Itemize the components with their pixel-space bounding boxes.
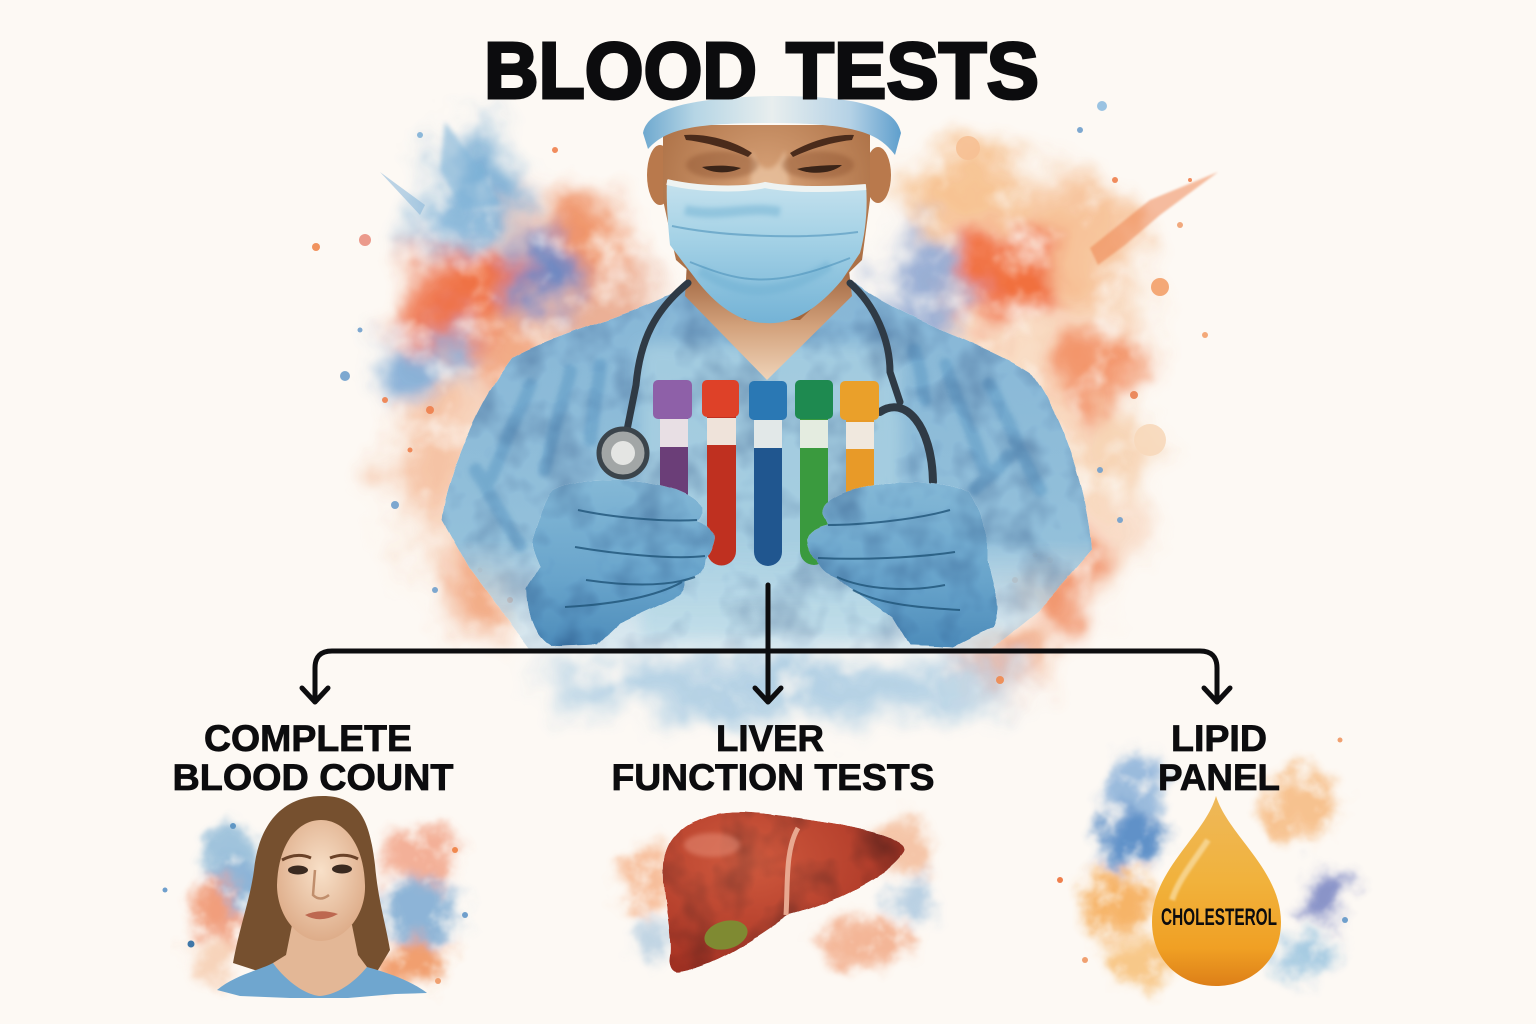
heading: liver function tests: FUNCTION TESTS bbox=[612, 757, 934, 798]
splash: lipid bbox=[1057, 738, 1350, 986]
chest wash bbox=[640, 345, 900, 640]
title: BLOOD bbox=[484, 26, 757, 115]
icon: cholesterol drop bbox=[1152, 796, 1281, 986]
face bbox=[277, 820, 365, 941]
stethoscope bbox=[599, 283, 933, 482]
heading: liver function tests bbox=[612, 718, 934, 798]
watercolor splash behind doctor bbox=[312, 101, 1218, 712]
heading: complete blood count bbox=[172, 718, 454, 798]
panel: lipid panel bbox=[1057, 718, 1350, 986]
panel: liver function tests bbox=[612, 718, 935, 972]
title bbox=[484, 26, 1039, 115]
features bbox=[282, 855, 358, 919]
head bbox=[663, 125, 870, 320]
heading: liver function tests: LIVER bbox=[716, 718, 824, 759]
neck bbox=[273, 925, 367, 996]
green tube bbox=[795, 380, 833, 565]
purple tube bbox=[653, 380, 692, 500]
scrub fold shading bbox=[475, 350, 1040, 545]
ears bbox=[647, 145, 891, 205]
splash streaks bbox=[380, 122, 1218, 265]
red tube bbox=[702, 380, 739, 566]
shoulders bbox=[217, 963, 427, 998]
blood test tubes bbox=[653, 380, 879, 566]
surgical cap bbox=[643, 96, 901, 155]
nose highlight bbox=[750, 150, 790, 188]
right glove bbox=[807, 482, 998, 647]
icon: woman portrait bbox=[217, 796, 427, 998]
splash: woman bbox=[162, 823, 468, 986]
heading: lipid panel bbox=[1158, 718, 1280, 798]
heading: lipid panel: LIPID bbox=[1171, 718, 1267, 759]
eyebrows and eyes bbox=[684, 135, 854, 173]
face mask bbox=[667, 180, 867, 323]
heading: complete blood count: COMPLETE bbox=[204, 718, 412, 759]
panel: complete blood count bbox=[162, 718, 468, 998]
splash: liver bbox=[620, 821, 935, 966]
drop label: CHOLESTEROL bbox=[1161, 904, 1277, 931]
mask folds bbox=[685, 210, 830, 290]
icon: liver bbox=[663, 812, 905, 972]
blue tube bbox=[749, 381, 787, 566]
splatter dots bbox=[312, 101, 1208, 684]
flow arrows bbox=[302, 585, 1230, 702]
hair bbox=[233, 796, 390, 975]
left glove bbox=[527, 480, 715, 647]
neck bbox=[685, 262, 852, 380]
orange tube bbox=[840, 381, 879, 503]
scrubs torso bbox=[442, 283, 1092, 650]
title: TESTS bbox=[786, 26, 1039, 115]
doctor illustration bbox=[442, 96, 1092, 650]
eye socket shading bbox=[686, 151, 758, 179]
heading: lipid panel: PANEL bbox=[1158, 757, 1280, 798]
heading: complete blood count: BLOOD COUNT bbox=[172, 757, 454, 798]
